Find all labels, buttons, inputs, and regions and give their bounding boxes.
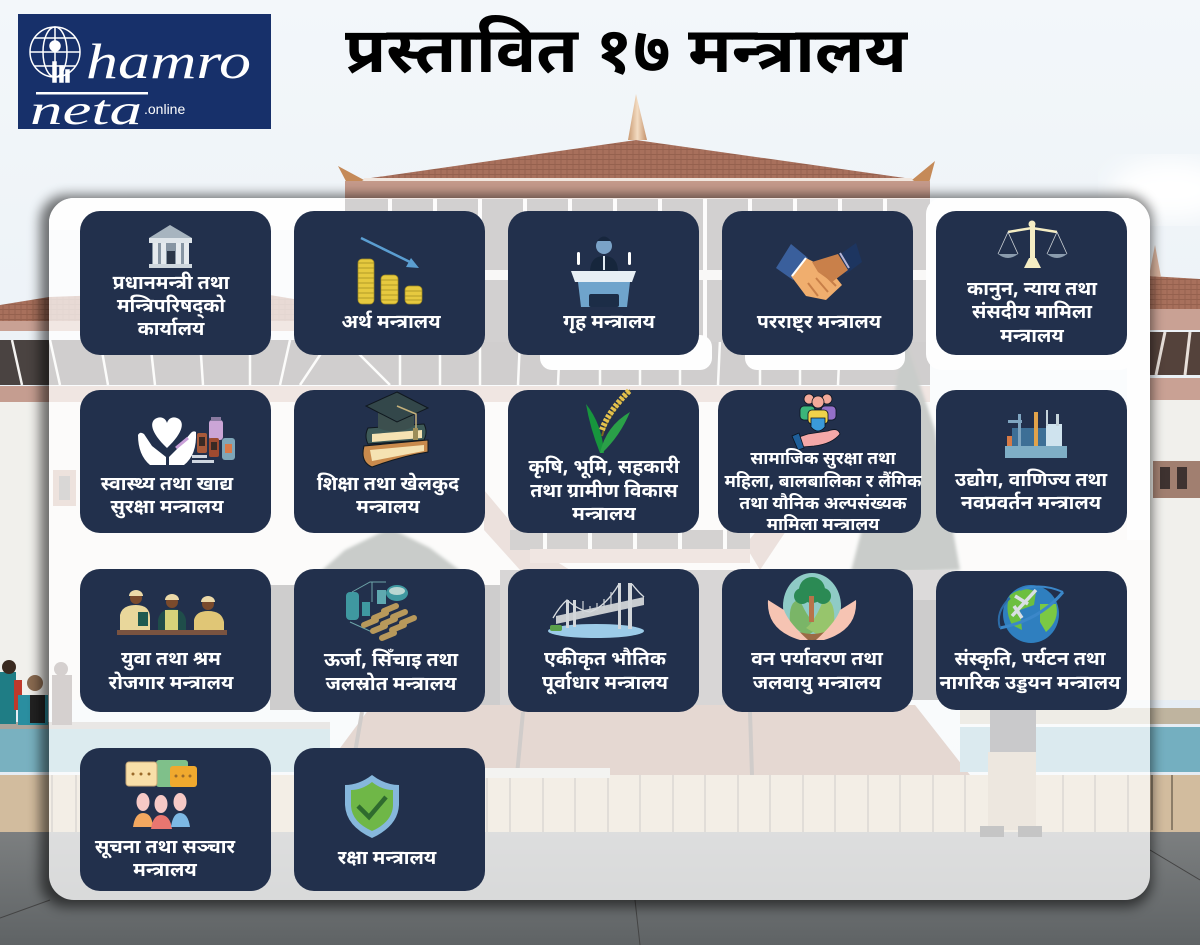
card: कृषि, भूमि, सहकारी तथा ग्रामीण विकास मन्त्रालय: तथा ग्रामीण विकास	[530, 480, 678, 505]
pavement	[0, 832, 1200, 945]
logo: neta	[30, 88, 142, 134]
card: स्वास्थ्य तथा खाद्य सुरक्षा मन्त्रालय: सुरक्षा मन्त्रालय	[111, 496, 224, 521]
roof and spire	[338, 94, 935, 199]
icon: suspension bridge	[548, 583, 644, 638]
card: एकीकृत भौतिक पूर्वाधार मन्त्रालय: एकीकृत भौतिक	[544, 647, 667, 673]
card: परराष्ट्र मन्त्रालय	[722, 211, 913, 355]
card: एकीकृत भौतिक पूर्वाधार मन्त्रालय: पूर्वाधार मन्त्रालय	[542, 671, 669, 697]
icon: people protected by hand	[792, 394, 840, 450]
card: कानुन, न्याय तथा संसदीय मामिला मन्त्रालय: कानुन, न्याय तथा	[967, 278, 1098, 303]
person right	[980, 705, 1042, 837]
icon: construction workers	[117, 590, 227, 635]
card: युवा तथा श्रम रोजगार मन्त्रालय	[80, 569, 271, 712]
card: अर्थ मन्त्रालय: अर्थ मन्त्रालय	[341, 310, 441, 336]
card: रक्षा मन्त्रालय	[294, 748, 485, 891]
pyramid	[320, 705, 970, 790]
card: कृषि, भूमि, सहकारी तथा ग्रामीण विकास मन्त्रालय: कृषि, भूमि, सहकारी	[528, 456, 681, 481]
card: सामाजिक सुरक्षा तथा महिला, बालबालिका र लैंगिक तथा यौनिक अल्पसंख्यक मामिला मन्त्रालय: तथा यौनिक अल्पसंख्यक	[739, 493, 907, 517]
card: संस्कृति, पर्यटन तथा नागरिक उड्डयन मन्त्रालय: संस्कृति, पर्यटन तथा	[954, 647, 1107, 673]
icon: globe emblem	[30, 27, 80, 82]
card: सूचना तथा सञ्चार मन्त्रालय: मन्त्रालय	[133, 859, 197, 884]
icon: government building	[149, 225, 192, 268]
card: युवा तथा श्रम रोजगार मन्त्रालय: रोजगार मन्त्रालय	[109, 672, 234, 697]
people left	[0, 660, 72, 725]
icon: globe with plane	[999, 585, 1063, 643]
card: ऊर्जा, सिँचाइ तथा जलस्रोत मन्त्रालय	[294, 569, 485, 712]
card: उद्योग, वाणिज्य तथा नवप्रवर्तन मन्त्रालय	[936, 390, 1127, 533]
card: वन पर्यावरण तथा जलवायु मन्त्रालय: वन पर्यावरण तथा	[751, 647, 884, 673]
icon: irrigation plant	[346, 582, 414, 638]
white patches of panel	[49, 198, 1150, 540]
logo: hamro	[86, 33, 251, 89]
card: ऊर्जा, सिँचाइ तथा जलस्रोत मन्त्रालय: जलस्रोत मन्त्रालय	[326, 673, 457, 698]
icon: hands, heart and medicine	[138, 417, 235, 465]
icon: scales of justice	[998, 220, 1067, 268]
icon: people with speech bubbles	[126, 760, 197, 829]
logo	[18, 14, 271, 134]
left wing and windows band	[0, 290, 930, 506]
right wing	[1149, 245, 1200, 498]
card: कानुन, न्याय तथा संसदीय मामिला मन्त्रालय: संसदीय मामिला	[972, 301, 1093, 326]
icon: factory	[1005, 410, 1067, 458]
card: सामाजिक सुरक्षा तथा महिला, बालबालिका र लैंगिक तथा यौनिक अल्पसंख्यक मामिला मन्त्रालय	[718, 390, 922, 538]
logo: .online	[144, 101, 185, 117]
card: प्रधानमन्त्री तथा मन्त्रिपरिषद्को कार्यालय: मन्त्रिपरिषद्को	[117, 295, 226, 320]
icon: falling coins	[358, 238, 422, 304]
card: उद्योग, वाणिज्य तथा नवप्रवर्तन मन्त्रालय: उद्योग, वाणिज्य तथा	[955, 469, 1108, 494]
main building body	[345, 196, 930, 570]
icon: shield with check	[345, 775, 399, 838]
card: रक्षा मन्त्रालय: रक्षा मन्त्रालय	[338, 847, 437, 872]
card: कानुन, न्याय तथा संसदीय मामिला मन्त्रालय: मन्त्रालय	[1000, 325, 1064, 350]
card: कृषि, भूमि, सहकारी तथा ग्रामीण विकास मन्त्रालय: मन्त्रालय	[572, 503, 636, 528]
icon: handshake	[776, 243, 862, 300]
card: स्वास्थ्य तथा खाद्य सुरक्षा मन्त्रालय	[80, 390, 271, 533]
trees	[320, 340, 960, 575]
icon: graduation cap on books	[363, 392, 428, 467]
card: शिक्षा तथा खेलकुद मन्त्रालय: मन्त्रालय	[356, 496, 420, 521]
card: युवा तथा श्रम रोजगार मन्त्रालय: युवा तथा श्रम	[121, 648, 221, 673]
card: स्वास्थ्य तथा खाद्य सुरक्षा मन्त्रालय: स्वास्थ्य तथा खाद्य	[101, 473, 234, 498]
card: संस्कृति, पर्यटन तथा नागरिक उड्डयन मन्त्रालय: नागरिक उड्डयन मन्त्रालय	[939, 672, 1121, 697]
card: सूचना तथा सञ्चार मन्त्रालय: सूचना तथा सञ्चार	[95, 836, 236, 861]
panel: translucent white card container	[40, 195, 1152, 907]
card: परराष्ट्र मन्त्रालय: परराष्ट्र मन्त्रालय	[757, 311, 882, 336]
card: प्रधानमन्त्री तथा मन्त्रिपरिषद्को कार्यालय: प्रधानमन्त्री तथा	[113, 272, 231, 297]
card: सामाजिक सुरक्षा तथा महिला, बालबालिका र लैंगिक तथा यौनिक अल्पसंख्यक मामिला मन्त्रालय: महिला, बालबालिका र लैंगिक	[724, 471, 922, 495]
card: कानुन, न्याय तथा संसदीय मामिला मन्त्रालय	[936, 211, 1127, 355]
card: अर्थ मन्त्रालय	[294, 211, 485, 355]
card: शिक्षा तथा खेलकुद मन्त्रालय	[294, 390, 485, 533]
card: गृह मन्त्रालय: गृह मन्त्रालय	[563, 311, 655, 336]
card: सामाजिक सुरक्षा तथा महिला, बालबालिका र लैंगिक तथा यौनिक अल्पसंख्यक मामिला मन्त्रालय: सामाजिक सुरक्षा तथा	[750, 448, 896, 472]
stone wall	[0, 768, 1200, 835]
icon: speaker at podium	[571, 236, 636, 307]
card: सूचना तथा सञ्चार मन्त्रालय	[80, 748, 271, 891]
card: शिक्षा तथा खेलकुद मन्त्रालय: शिक्षा तथा खेलकुद	[317, 472, 460, 498]
card: उद्योग, वाणिज्य तथा नवप्रवर्तन मन्त्रालय: नवप्रवर्तन मन्त्रालय	[961, 491, 1102, 517]
pool	[0, 708, 1200, 772]
card: सामाजिक सुरक्षा तथा महिला, बालबालिका र लैंगिक तथा यौनिक अल्पसंख्यक मामिला मन्त्रालय: मामिला मन्त्रालय	[767, 514, 880, 538]
card: संस्कृति, पर्यटन तथा नागरिक उड्डयन मन्त्रालय	[936, 571, 1127, 710]
card: एकीकृत भौतिक पूर्वाधार मन्त्रालय	[508, 569, 699, 712]
card: वन पर्यावरण तथा जलवायु मन्त्रालय	[722, 569, 913, 712]
icon: tree held in hands	[768, 573, 856, 640]
card: प्रधानमन्त्री तथा मन्त्रिपरिषद्को कार्यालय	[80, 211, 271, 355]
card: प्रधानमन्त्री तथा मन्त्रिपरिषद्को कार्यालय: कार्यालय	[138, 317, 205, 343]
lobby	[270, 570, 950, 710]
card: गृह मन्त्रालय	[508, 211, 699, 355]
card: कृषि, भूमि, सहकारी तथा ग्रामीण विकास मन्त्रालय	[508, 390, 699, 533]
card: वन पर्यावरण तथा जलवायु मन्त्रालय: जलवायु मन्त्रालय	[753, 672, 882, 697]
icon: rice plant	[586, 390, 630, 453]
card: ऊर्जा, सिँचाइ तथा जलस्रोत मन्त्रालय: ऊर्जा, सिँचाइ तथा	[324, 648, 459, 674]
title: प्रस्तावित १७ मन्त्रालय	[345, 16, 908, 98]
